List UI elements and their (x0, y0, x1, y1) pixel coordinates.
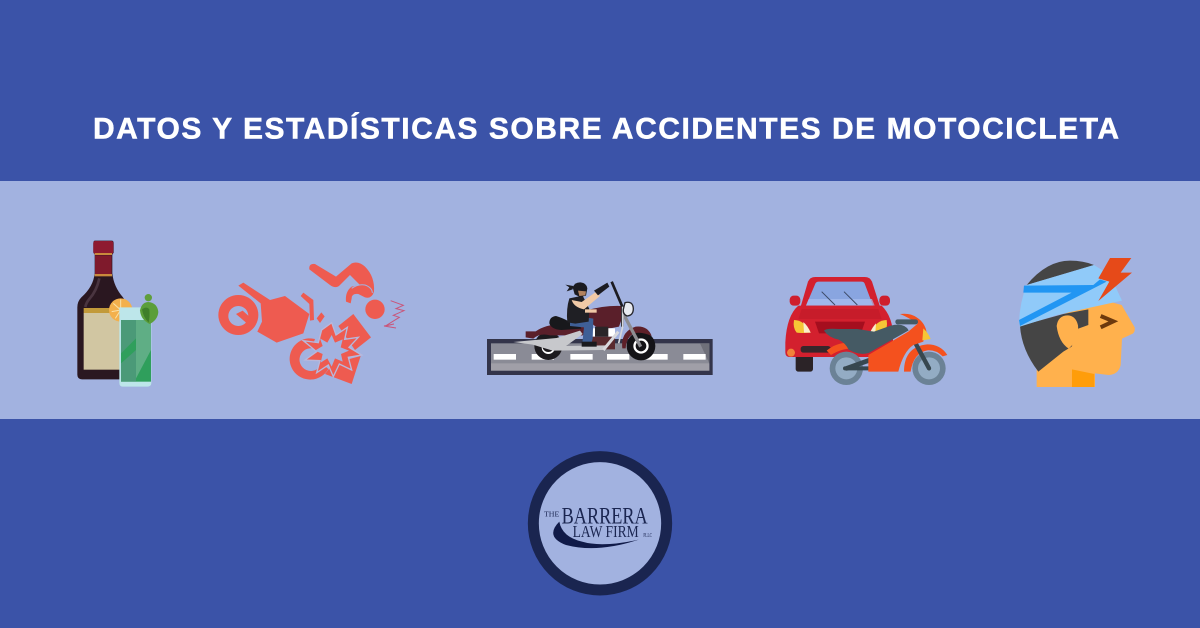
front wheel (627, 332, 655, 360)
bike frame with fender (238, 283, 309, 343)
logo: The Barrera Law Firm (533, 457, 667, 590)
fenders (827, 343, 855, 355)
lane dashes (494, 354, 706, 360)
icon: injured head with bandage (1019, 258, 1135, 387)
forks (612, 282, 622, 327)
icon: motorcycle crash (218, 263, 404, 384)
logo text: law firm: LAW FIRM (573, 522, 639, 541)
bandage (1019, 265, 1122, 327)
logo text: pllc: PLLC (643, 532, 652, 539)
logo ring (533, 457, 667, 590)
car body (785, 306, 893, 357)
road (487, 339, 713, 375)
engine (592, 328, 615, 337)
icon: liquor bottle and cocktail (77, 241, 158, 387)
panel: light blue icon band (0, 181, 1200, 419)
moto body (868, 322, 924, 372)
logo text: barrera: BARRERA (562, 503, 648, 529)
fenders (526, 325, 582, 339)
windshield (806, 282, 873, 306)
title: DATOS Y ESTADÍSTICAS SOBRE ACCIDENTES DE MOTOCICLETA (93, 112, 1119, 146)
car wheel (796, 353, 813, 372)
rider (309, 263, 374, 303)
eye mark (1101, 316, 1113, 327)
head (365, 300, 385, 319)
neck shade (1072, 369, 1094, 387)
head (573, 282, 587, 297)
exhaust (513, 331, 606, 351)
rear box (338, 314, 371, 350)
rear wheel (290, 338, 328, 380)
icon: biker on motorcycle on a road (487, 282, 713, 375)
logo swoosh (553, 522, 639, 548)
logo text: the: THE (544, 509, 560, 518)
moto wheels (830, 352, 863, 385)
grille (815, 322, 865, 333)
rear wheel (534, 332, 562, 360)
nose and windscreen (900, 314, 927, 337)
legs (570, 318, 593, 346)
icon: car and motorcycle (785, 277, 947, 385)
headlight (623, 302, 633, 316)
handlebar (895, 319, 918, 324)
explosion (303, 323, 362, 377)
seat (549, 316, 581, 330)
tank and body (585, 306, 622, 328)
car roof (801, 277, 880, 307)
arms (572, 291, 600, 309)
handlebar (301, 293, 314, 321)
mirrors (790, 296, 800, 306)
face and neck (1037, 300, 1135, 387)
headlights (794, 320, 811, 333)
back hair (1020, 309, 1088, 372)
moto seat and tank (824, 325, 909, 354)
top hair (1027, 261, 1094, 285)
lightning bolt (1098, 258, 1132, 301)
swing arm and fork (847, 360, 870, 368)
bumper details (801, 346, 831, 353)
impact mark (384, 301, 404, 328)
front wheel (218, 295, 258, 335)
bandage strap (1019, 279, 1107, 326)
ear (1057, 315, 1079, 349)
torso (567, 296, 589, 324)
